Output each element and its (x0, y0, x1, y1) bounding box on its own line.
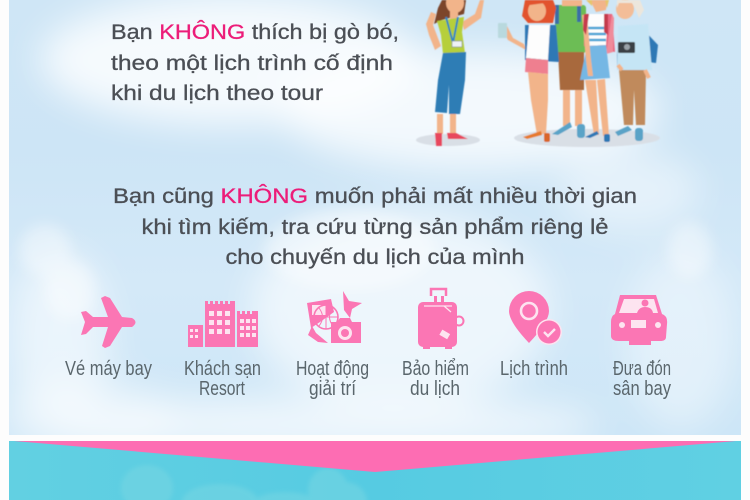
icon: hotel (188, 301, 258, 347)
text block: first statement: theo một lịch trình cố định (111, 52, 393, 75)
text block: second statement (113, 185, 637, 269)
text block: second statement: cho chuyến du lịch của mình (226, 246, 524, 269)
label: Khách sạn Resort: Resort (199, 378, 245, 400)
traveller: older man (615, 0, 658, 141)
label: Hoạt động giải trí: Hoạt động (296, 358, 369, 380)
label: Bảo hiểm du lịch: Bảo hiểm (402, 358, 469, 380)
traveller: man in green (552, 0, 586, 138)
icon: map pin with check (509, 291, 562, 345)
banner: pink downward triangle (14, 441, 736, 472)
label: Đưa đón sân bay: Đưa đón (613, 358, 671, 380)
text block: first statement: Bạn KHÔNG thích bị gò bó, (111, 21, 399, 44)
icon: airplane (81, 296, 136, 348)
label: Khách sạn Resort: Khách sạn (184, 358, 261, 380)
icon: car (611, 295, 667, 345)
label: Bảo hiểm du lịch (402, 358, 469, 400)
icon: activities (307, 291, 362, 343)
label: Vé máy bay: Vé máy bay (65, 358, 152, 380)
label: Lịch trình: Lịch trình (500, 358, 568, 380)
traveller: girl in blue dress (580, 0, 615, 142)
text block: first statement: khi du lịch theo tour (111, 82, 323, 105)
text block: second statement: Bạn cũng KHÔNG muốn phải mất nhiều thời gian (113, 185, 637, 208)
label: Hoạt động giải trí (296, 358, 369, 400)
label: Hoạt động giải trí: giải trí (309, 378, 356, 400)
label: Đưa đón sân bay: sân bay (613, 378, 671, 400)
label: Đưa đón sân bay (613, 358, 671, 400)
text block: second statement: khi tìm kiếm, tra cứu từng sản phẩm riêng lẻ (142, 216, 608, 239)
icon: suitcase (418, 289, 464, 349)
panel: teal section (9, 441, 741, 500)
text block: first statement (111, 21, 399, 105)
illustration: group of travellers (498, 0, 660, 147)
illustration: tour guide (416, 0, 484, 146)
label: Bảo hiểm du lịch: du lịch (410, 378, 460, 400)
label: Khách sạn Resort (184, 358, 261, 400)
clouds in teal section (121, 465, 367, 500)
traveller: red-haired girl (498, 0, 559, 142)
